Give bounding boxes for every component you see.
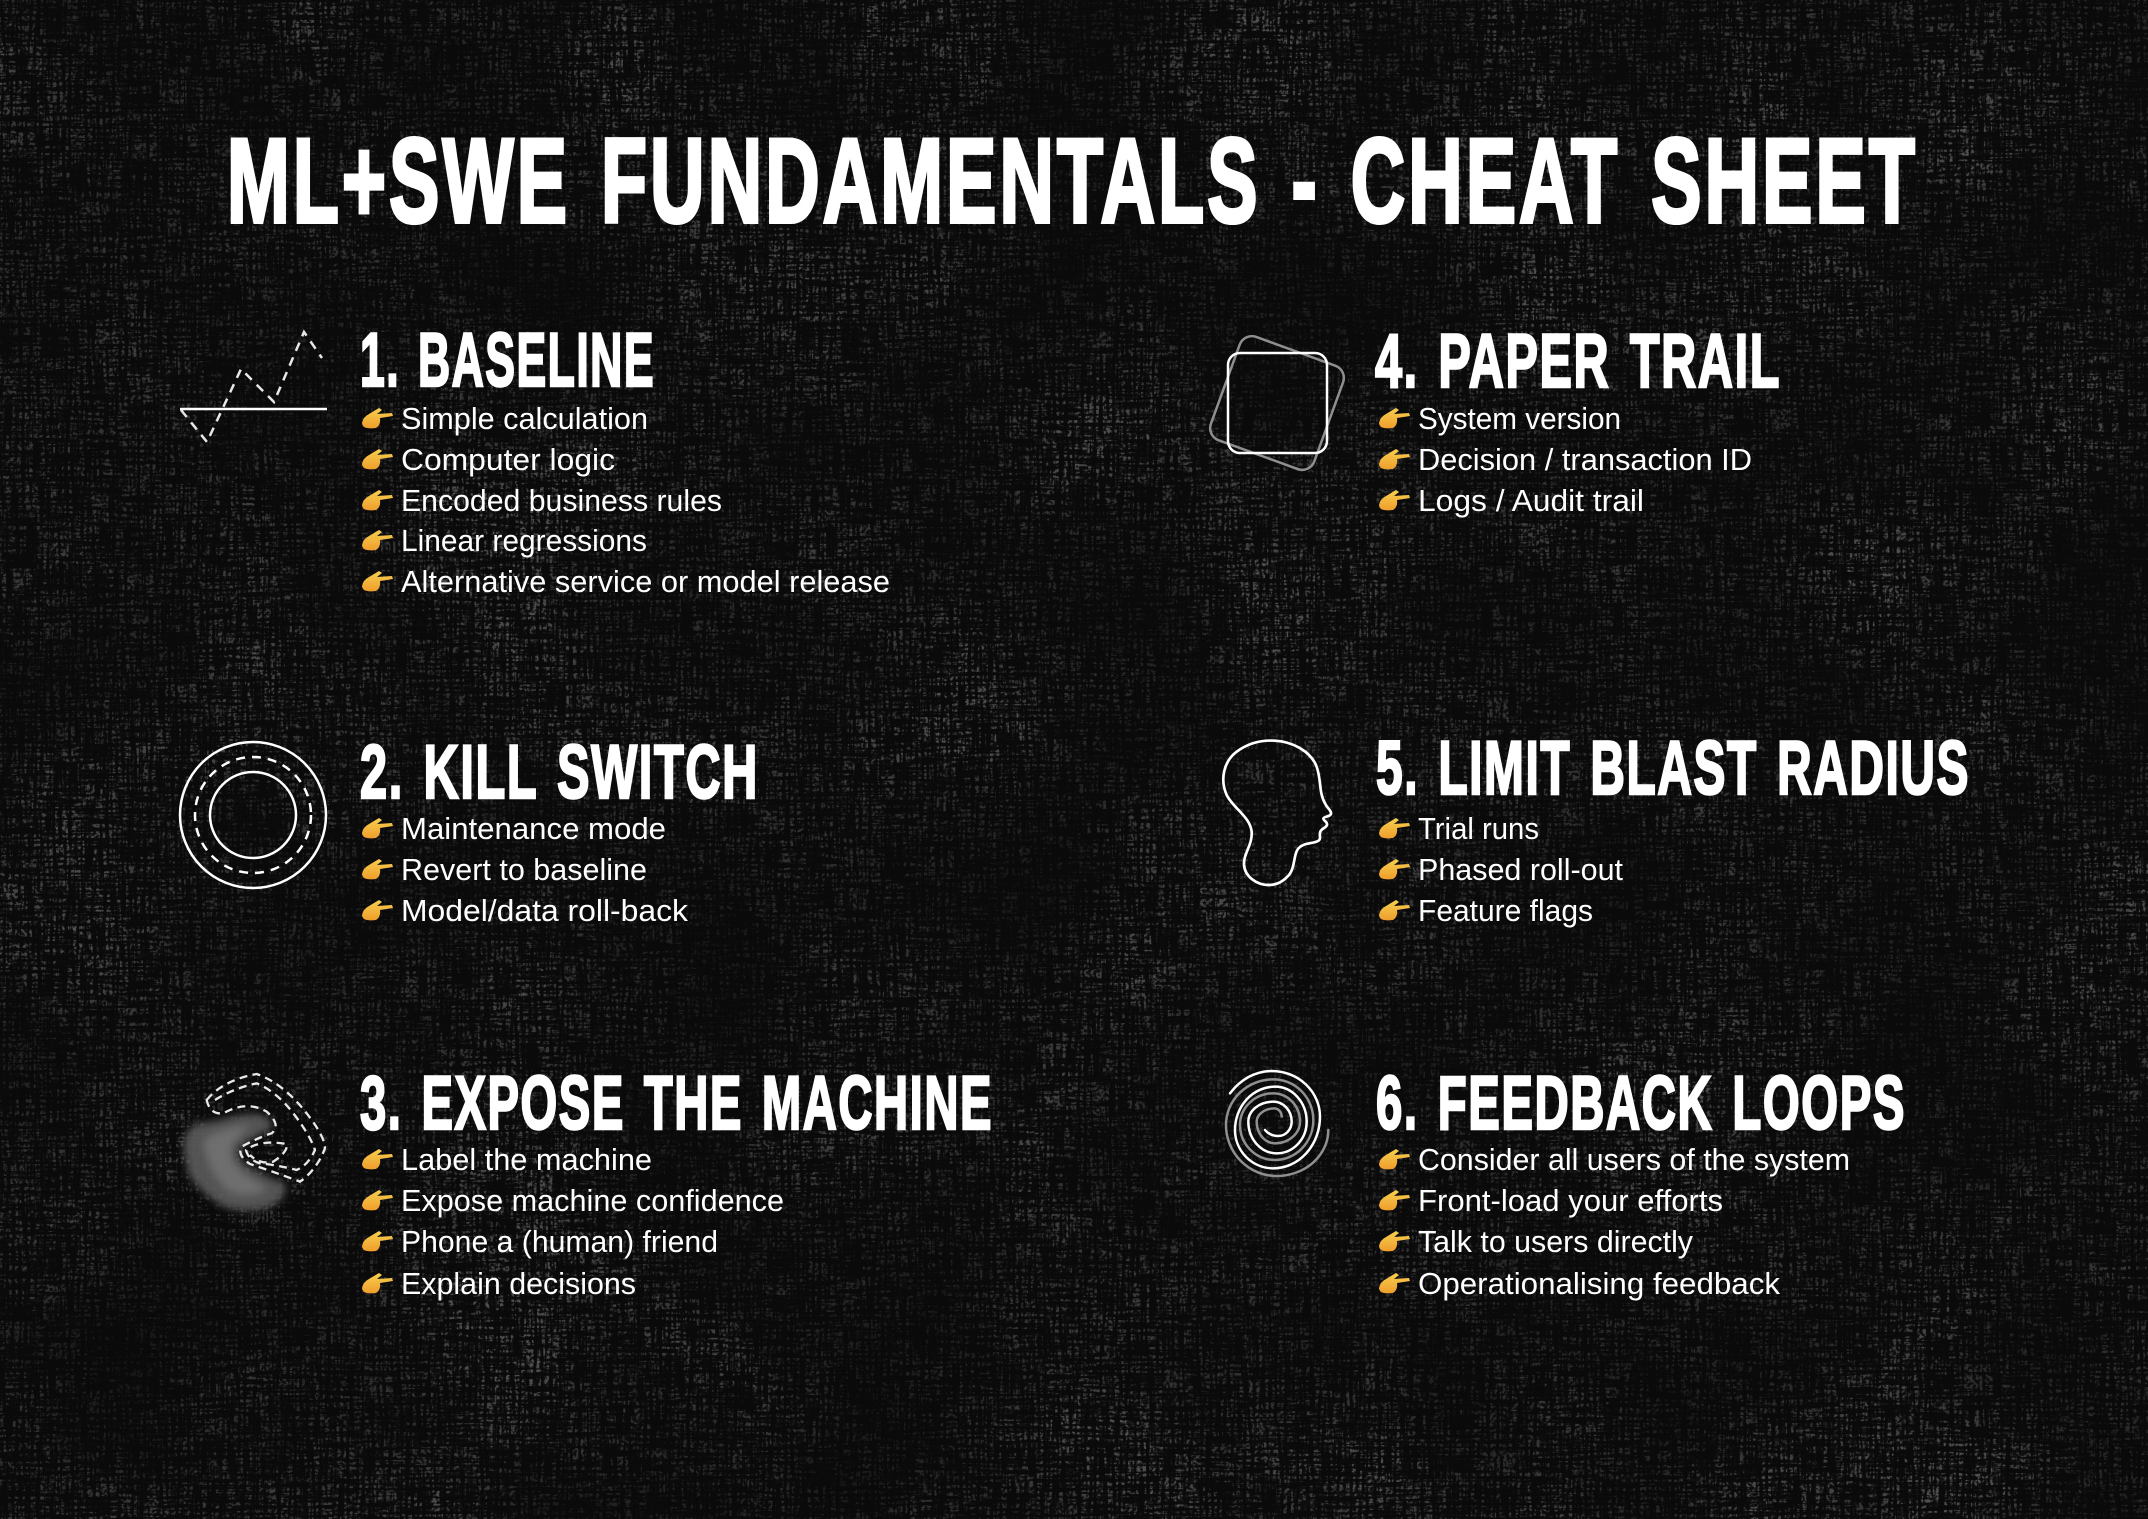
- bullet list: limit blast radius: [1379, 811, 1623, 928]
- bullet list: paper trail: [1379, 401, 1752, 518]
- bullet: trial runs: Trial runs: [1418, 811, 1539, 846]
- panel: baseline: [180, 318, 890, 599]
- bullet: explain decisions: Explain decisions: [401, 1266, 636, 1301]
- bullet: logs: Logs / Audit trail: [1418, 483, 1644, 518]
- panel: feedback loops: [1226, 1061, 1906, 1301]
- bullet: encoded business rules: Encoded business rules: [401, 483, 722, 518]
- bullet: maintenance mode: Maintenance mode: [401, 811, 666, 846]
- bullet: model/data roll-back: Model/data roll-back: [401, 893, 689, 928]
- bullet list: expose the machine: [362, 1142, 784, 1301]
- heading: baseline: 1. BASELINE: [360, 318, 655, 403]
- bullet: operationalising feedback: Operationalising feedback: [1418, 1266, 1781, 1301]
- bullet: consider all users: Consider all users of the system: [1418, 1142, 1850, 1177]
- bullet: talk to users: Talk to users directly: [1418, 1224, 1693, 1259]
- panel: kill switch: [180, 730, 759, 928]
- heading: kill switch: 2. KILL SWITCH: [360, 730, 759, 815]
- bullet: computer logic: Computer logic: [401, 442, 615, 477]
- icon: overlapping rounded squares: [1207, 333, 1347, 473]
- icon: baseline chart: [180, 332, 327, 442]
- bullet: simple calculation: Simple calculation: [401, 401, 648, 436]
- bullet: system version: System version: [1418, 401, 1621, 436]
- heading: paper trail: 4. PAPER TRAIL: [1375, 319, 1781, 404]
- bullet: expose machine confidence: Expose machine confidence: [401, 1183, 784, 1218]
- bullet: feature flags: Feature flags: [1418, 893, 1593, 928]
- bullet: revert to baseline: Revert to baseline: [401, 852, 647, 887]
- icon: double spiral: [1226, 1071, 1328, 1176]
- panel: limit blast radius: [1223, 726, 1970, 928]
- bullet: linear regressions: Linear regressions: [401, 523, 647, 558]
- bullet: front-load: Front-load your efforts: [1418, 1183, 1723, 1218]
- bullet list: kill switch: [362, 811, 689, 928]
- bullet: phased roll-out: Phased roll-out: [1418, 852, 1623, 887]
- icon: concentric circles: [180, 742, 326, 888]
- icon: blurred blob with dashed contours: [183, 1074, 325, 1210]
- bullet: label the machine: Label the machine: [401, 1142, 652, 1177]
- bullet list: baseline: [362, 401, 890, 599]
- heading: expose the machine: 3. EXPOSE THE MACHINE: [360, 1061, 993, 1146]
- bullet: phone a friend: Phone a (human) friend: [401, 1224, 718, 1259]
- icon: head profile: [1223, 741, 1331, 885]
- panel: paper trail: [1207, 319, 1781, 518]
- bullet list: feedback loops: [1379, 1142, 1850, 1301]
- panel: expose the machine: [183, 1061, 993, 1301]
- bullet: alternative service: Alternative service or model release: [401, 564, 890, 599]
- bullet: decision id: Decision / transaction ID: [1418, 442, 1752, 477]
